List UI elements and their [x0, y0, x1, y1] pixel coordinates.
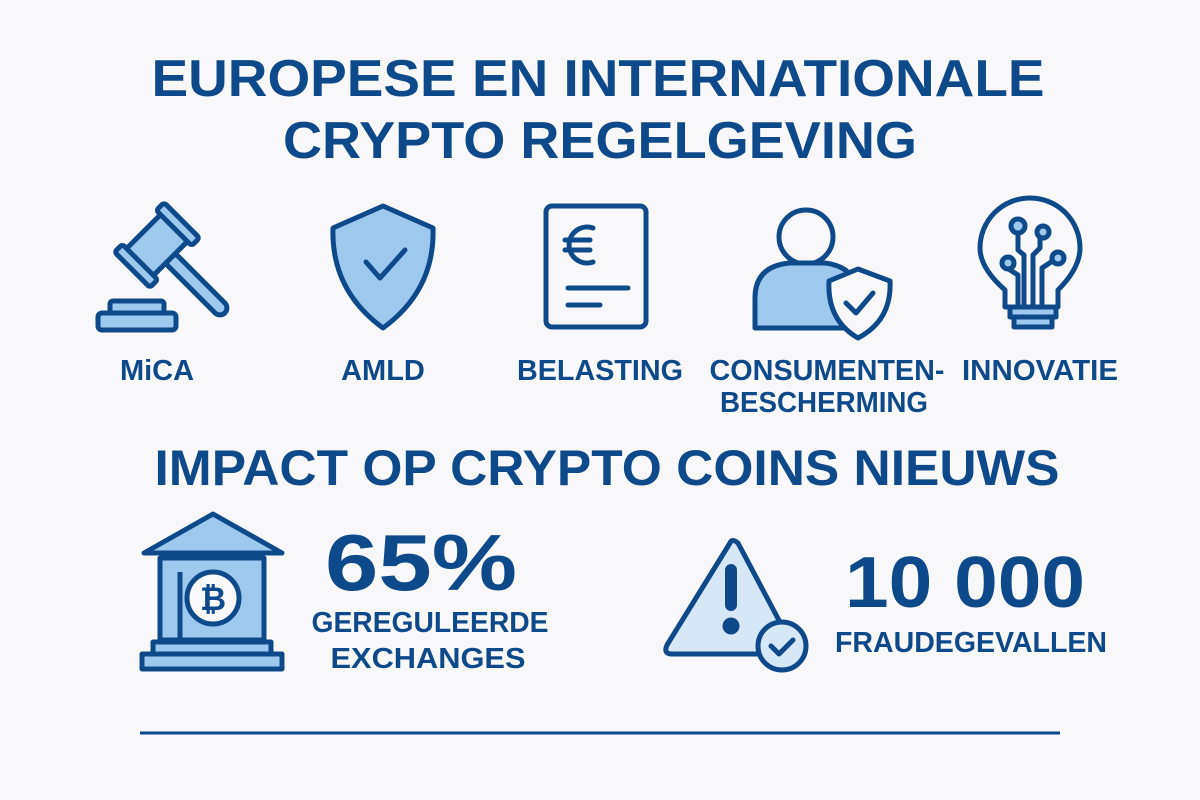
label: consumentenbescherming: CONSUMENTEN- [710, 355, 944, 387]
section heading: IMPACT OP CRYPTO COINS NIEUWS [154, 440, 1060, 496]
label: consumentenbescherming [710, 355, 944, 419]
title: EUROPESE EN INTERNATIONALE [152, 50, 1044, 108]
stat: 65% [312, 518, 548, 675]
icon: lightbulb [980, 198, 1080, 327]
stat: 65%: EXCHANGES [330, 643, 526, 675]
icon: consumer protection [755, 210, 890, 338]
icon: bank with bitcoin: ₿ [200, 581, 226, 617]
label: AMLD: AMLD [341, 355, 425, 387]
icon: tax document [546, 206, 646, 327]
stat: 10 000 [835, 543, 1107, 659]
label: BELASTING: BELASTING [517, 355, 683, 387]
stat: 10 000: 10 000 [845, 543, 1085, 623]
title: CRYPTO REGELGEVING [283, 112, 917, 170]
label: INNOVATIE: INNOVATIE [962, 355, 1118, 387]
label: consumentenbescherming: BESCHERMING [720, 387, 928, 419]
stat: 65%: 65% [325, 518, 517, 607]
icon: bank with bitcoin [142, 514, 282, 669]
title [152, 50, 1044, 170]
label: MiCA: MiCA [120, 355, 194, 387]
stat: 10 000: FRAUDEGEVALLEN [835, 627, 1107, 659]
icon: warning with check [666, 540, 806, 670]
stat: 65%: GEREGULEERDE [312, 607, 548, 639]
icon: shield [333, 206, 433, 328]
icon: gavel [98, 203, 250, 338]
